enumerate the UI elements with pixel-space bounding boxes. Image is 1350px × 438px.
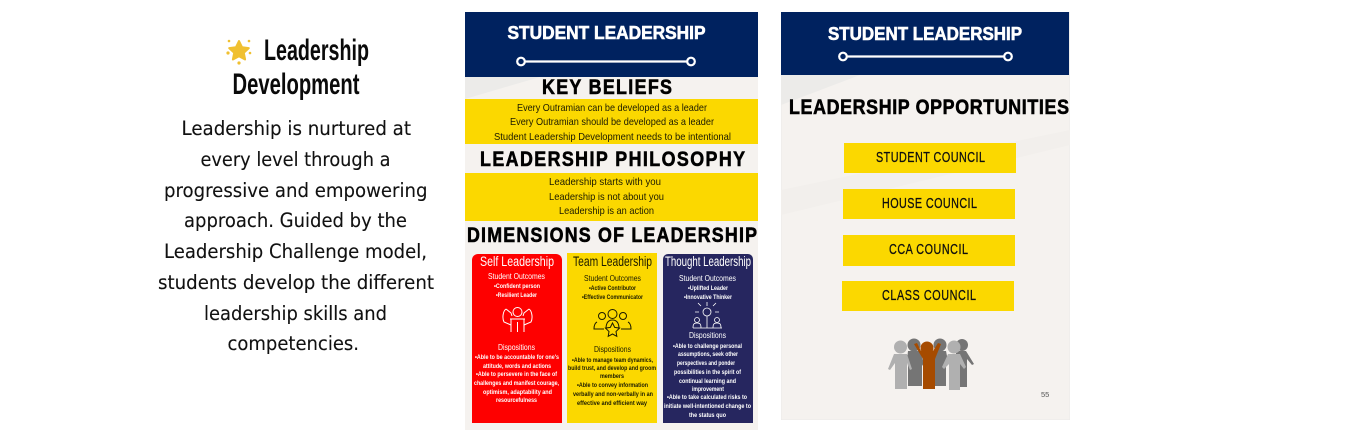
page number: 55	[1041, 390, 1049, 399]
heading: Leadership Development	[232, 34, 369, 101]
button: house council	[843, 189, 1015, 219]
icon: lightbulb over group	[693, 302, 722, 328]
icon: team with star	[594, 310, 631, 336]
body paragraph: Leadership is nurtured at	[182, 117, 411, 140]
card: team leadership: verbally and non-verbally in an	[573, 391, 653, 398]
card: team leadership: •Able to convey information	[577, 382, 648, 389]
card: thought leadership: possibilities in the spirit of	[674, 369, 742, 376]
card: thought leadership: •Able to challenge personal	[673, 343, 742, 350]
card: team leadership: build trust, and develop and groom	[568, 365, 656, 372]
heading: Leadership Development: Development	[232, 68, 360, 101]
card: thought leadership: Dispositions	[689, 330, 726, 340]
panel: student leadership beliefs poster	[465, 12, 758, 430]
card: thought leadership: assumptions, seek other	[678, 351, 738, 358]
button: house council: HOUSE COUNCIL	[882, 194, 977, 211]
poster header	[465, 12, 758, 77]
button: class council	[842, 281, 1014, 311]
philosophy band	[465, 173, 758, 221]
card: self leadership: Self Leadership	[480, 254, 554, 269]
poster header: STUDENT LEADERSHIP	[508, 23, 706, 43]
button: student council: STUDENT COUNCIL	[876, 148, 985, 165]
card: team leadership: Dispositions	[594, 344, 631, 354]
key beliefs band: Every Outramian should be developed as a leader	[510, 116, 714, 128]
body paragraph: leadership skills and	[204, 302, 387, 325]
card: team leadership: Team Leadership	[573, 254, 652, 269]
card: self leadership: attitude, words and actions	[483, 363, 551, 370]
card: team leadership: members	[600, 373, 624, 380]
key beliefs band: Every Outramian can be developed as a leader	[517, 102, 707, 114]
card: self leadership	[472, 254, 562, 423]
philosophy band: Leadership starts with you	[549, 176, 661, 188]
philosophy band: Leadership is an action	[559, 205, 654, 217]
card: team leadership: Student Outcomes	[584, 273, 641, 283]
body paragraph: students develop the different	[158, 271, 434, 294]
card: self leadership: challenges and manifest courage,	[474, 380, 559, 387]
key beliefs band	[465, 99, 758, 144]
card: self leadership: Student Outcomes	[488, 271, 545, 281]
button: class council: CLASS COUNCIL	[882, 286, 976, 303]
body paragraph: competencies.	[228, 332, 359, 355]
card: thought leadership	[663, 254, 753, 423]
button: cca council	[843, 235, 1015, 266]
card: team leadership: •Active Contributor	[589, 285, 636, 292]
card: self leadership: Dispositions	[498, 342, 535, 352]
heading: leadership philosophy: LEADERSHIP PHILOSOPHY	[480, 148, 745, 171]
card: thought leadership: Thought Leadership	[665, 254, 751, 269]
card: self leadership: •Able to persevere in the face of	[476, 371, 558, 378]
card: self leadership: optimism, adaptability and	[483, 389, 552, 396]
body paragraph: Leadership Challenge model,	[164, 240, 427, 263]
icon: group of people	[888, 338, 974, 390]
card: team leadership: •Able to manage team dynamics,	[572, 357, 653, 364]
button: cca council: CCA COUNCIL	[889, 240, 968, 257]
body paragraph: every level through a	[200, 148, 390, 171]
card: thought leadership: continual learning and	[679, 378, 736, 385]
body paragraph	[158, 117, 434, 355]
heading: key beliefs: KEY BELIEFS	[542, 76, 672, 99]
card: thought leadership: •Able to take calculated risks to	[667, 394, 747, 401]
card: thought leadership: improvement	[692, 386, 725, 393]
button: student council	[844, 143, 1016, 173]
left text column	[158, 34, 434, 355]
poster header: STUDENT LEADERSHIP	[828, 24, 1022, 44]
card: self leadership: resourcefulness	[496, 397, 537, 404]
card: team leadership: effective and efficient way	[577, 400, 647, 407]
panel: leadership opportunities poster	[781, 12, 1070, 420]
card: self leadership: •Confident person	[494, 283, 540, 290]
poster header	[781, 12, 1069, 75]
card: team leadership	[567, 253, 657, 423]
icon: glowing star	[226, 40, 251, 65]
card: thought leadership: perspectives and ponder	[677, 360, 735, 367]
heading: dimensions of leadership: DIMENSIONS OF LEADERSHIP	[467, 224, 757, 247]
card: thought leadership: •Innovative Thinker	[684, 294, 732, 301]
card: thought leadership: the status quo	[689, 412, 726, 419]
card: team leadership: •Effective Communicator	[582, 294, 643, 301]
card: self leadership: •Able to be accountable for one's	[475, 354, 559, 361]
card: self leadership: •Resilient Leader	[496, 292, 537, 299]
card: thought leadership: initiate well-intentioned change to	[664, 403, 751, 410]
card: thought leadership: •Uplifted Leader	[688, 285, 728, 292]
body paragraph: progressive and empowering	[164, 179, 428, 202]
heading: leadership opportunities: LEADERSHIP OPPORTUNITIES	[789, 96, 1069, 119]
philosophy band: Leadership is not about you	[549, 191, 664, 203]
key beliefs band: Student Leadership Development needs to be intentional	[494, 131, 731, 143]
card: thought leadership: Student Outcomes	[679, 273, 736, 283]
heading: Leadership Development: Leadership	[264, 34, 369, 67]
body paragraph: approach. Guided by the	[184, 209, 407, 232]
icon: person flexing	[503, 308, 532, 332]
